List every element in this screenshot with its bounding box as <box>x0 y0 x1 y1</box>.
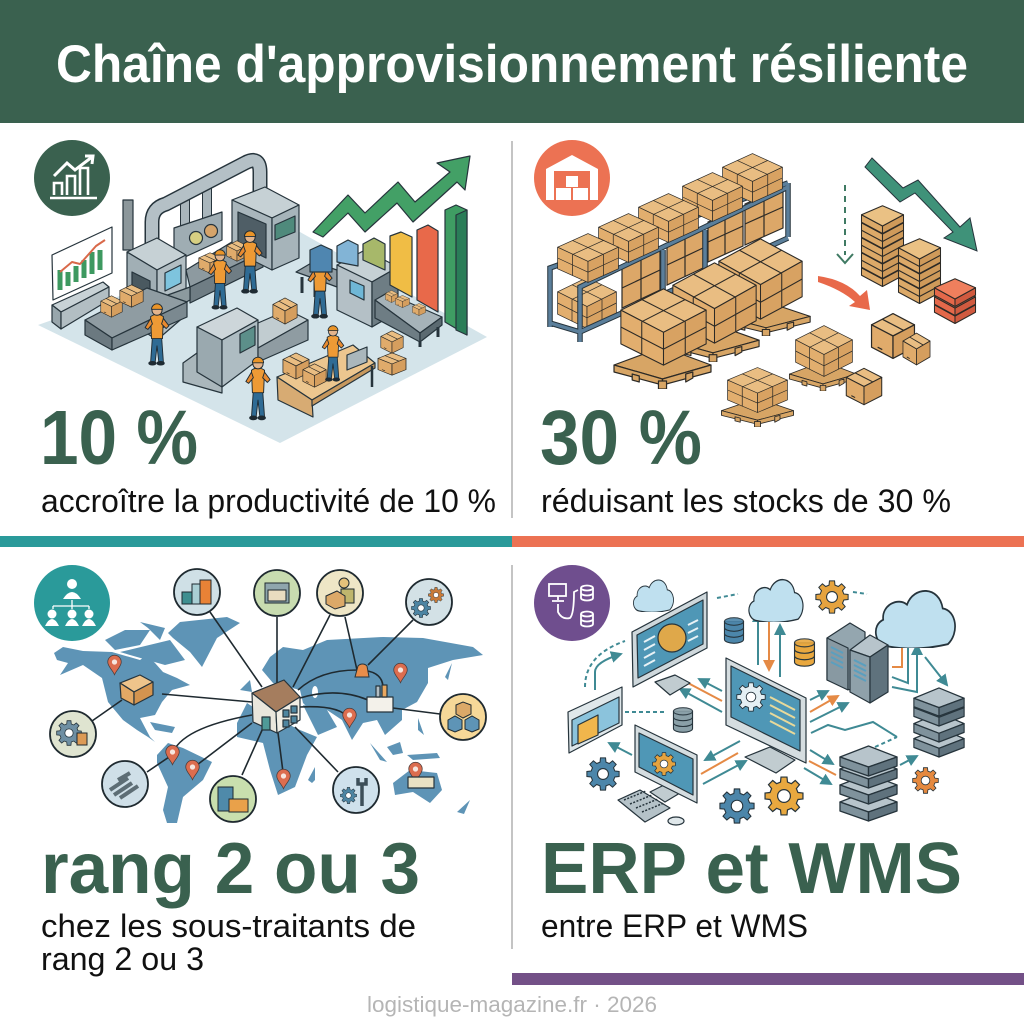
stacks of flat boxes <box>862 206 976 324</box>
node: orange marker <box>355 664 369 677</box>
supplier: cubes <box>440 694 486 740</box>
supplier: tools <box>333 767 379 813</box>
header band with title <box>0 0 1024 123</box>
arrow: falling green <box>865 158 977 251</box>
workers <box>145 231 344 420</box>
value: rang 2 ou 3: rang 2 ou 3 <box>41 829 420 909</box>
connection arrows <box>585 592 947 784</box>
network links <box>92 612 440 775</box>
server rack: right <box>914 688 964 757</box>
caption: subcontractors: chez les sous-traitants de <box>41 908 416 944</box>
browser window <box>568 687 622 753</box>
icon: warehouse badge <box>534 140 610 216</box>
clouds <box>633 580 955 649</box>
monitor: top-left <box>632 592 707 695</box>
supplier: worker with box <box>317 570 363 616</box>
monitor: central <box>726 658 806 773</box>
keyboard and mouse <box>618 790 684 825</box>
databases <box>673 618 814 732</box>
pallets <box>614 239 930 427</box>
supplier: containers <box>210 776 256 822</box>
panel: ERP and WMS systems <box>534 565 964 944</box>
supplier: warehouse <box>254 570 300 616</box>
value: 30 %: 30 % <box>540 395 702 481</box>
accent bar: purple <box>512 973 1024 985</box>
bar chart <box>310 205 467 335</box>
arrow: coral curved <box>818 276 870 310</box>
machines and pipes <box>127 160 299 340</box>
value: 10 %: 10 % <box>40 395 198 481</box>
supplier: steel bars <box>102 761 148 807</box>
value: ERP et WMS: ERP et WMS <box>541 829 962 909</box>
center machine <box>183 298 308 393</box>
illustration: warehouse shelves and pallets <box>550 154 977 427</box>
supplier: gear and document <box>50 711 96 757</box>
supplier icons <box>50 569 486 822</box>
shelf rack with boxes <box>550 154 788 342</box>
location pins <box>108 655 422 789</box>
accent bar: coral <box>512 536 1024 547</box>
accent bar: teal <box>0 536 512 547</box>
right machine and belts <box>296 250 442 347</box>
arrow: rising green <box>313 156 470 237</box>
icon: hierarchy badge <box>34 565 110 641</box>
illustration: isometric factory <box>38 156 487 443</box>
icon: growth chart badge <box>34 140 110 216</box>
arrow: dashed down <box>837 185 853 263</box>
title: Chaîne d'approvisionnement résiliente <box>56 35 968 94</box>
caption: second line: rang 2 ou 3 <box>41 941 204 977</box>
panel: stock reduction <box>534 140 977 519</box>
node: Australia site map <box>408 777 434 788</box>
desk with boxes and laptop <box>277 331 406 417</box>
footer: logistique-magazine.fr · 2026 <box>367 992 657 1017</box>
caption: ERP WMS: entre ERP et WMS <box>541 908 808 944</box>
caption: productivity: accroître la productivité de 10 % <box>41 483 496 519</box>
node: factory <box>367 685 393 712</box>
icon: system connections badge <box>534 565 610 641</box>
illustration: world map <box>54 617 483 823</box>
supplier: factories <box>174 569 220 615</box>
monitor: bottom-left <box>635 725 697 803</box>
screen chart <box>52 227 112 300</box>
panel: productivity <box>34 140 496 519</box>
panel: supplier network <box>34 565 486 977</box>
caption: stocks: réduisant les stocks de 30 % <box>541 483 951 519</box>
node: box <box>120 675 153 705</box>
supplier: gears <box>406 579 452 625</box>
servers <box>827 623 888 703</box>
gears <box>587 581 938 823</box>
hub building <box>252 680 300 733</box>
server rack: bottom <box>840 746 897 821</box>
